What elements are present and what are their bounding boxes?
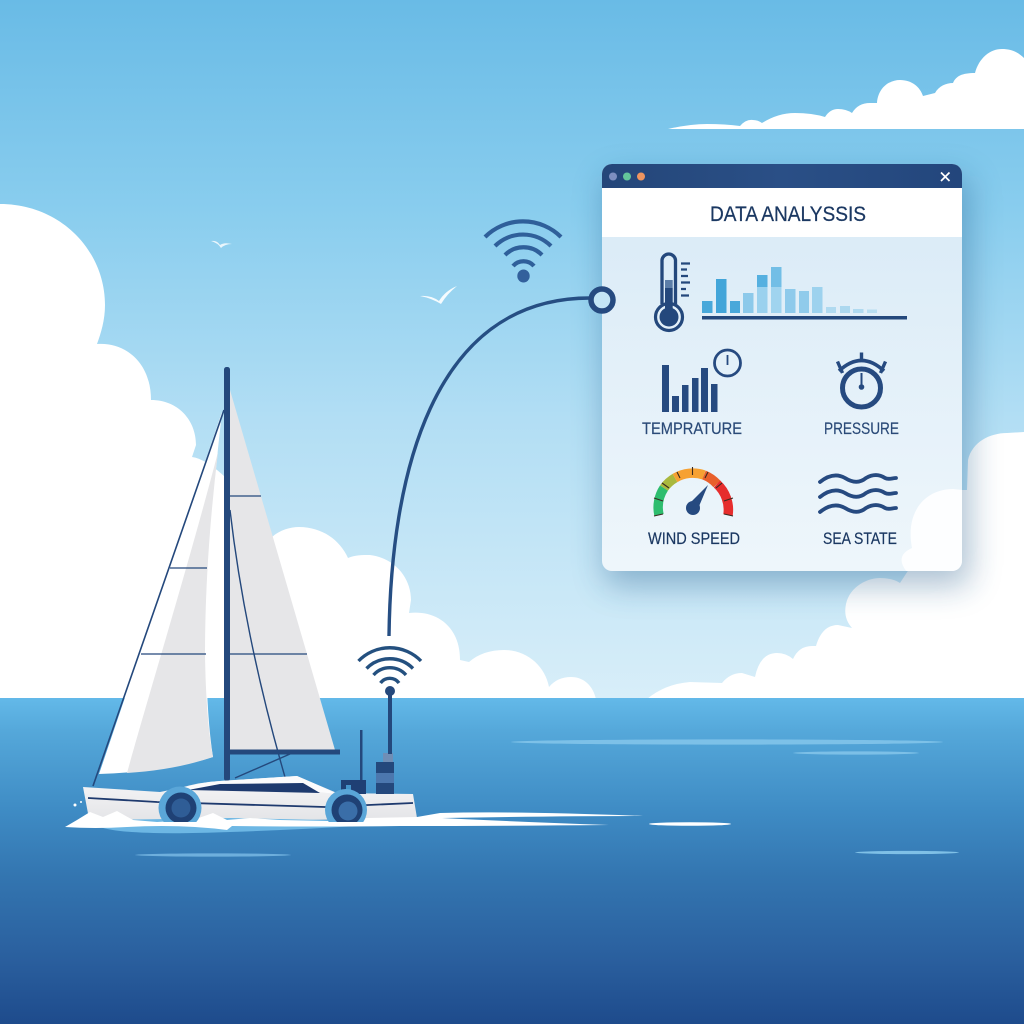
cabin top	[180, 776, 337, 794]
hull	[83, 776, 417, 824]
bird: large	[420, 286, 457, 304]
icon: upper wifi signal	[485, 221, 561, 282]
label: sea state: SEA STATE	[823, 529, 897, 548]
bar chart: histogram	[702, 267, 907, 320]
panel body	[602, 164, 962, 571]
icon: temperature bars with clock	[662, 350, 740, 412]
icon: pressure gauge	[838, 352, 886, 407]
rigging	[93, 410, 307, 786]
cloud: lower right bank	[647, 432, 1024, 699]
connection node	[591, 289, 613, 311]
sea highlights	[135, 739, 959, 857]
mast	[224, 367, 230, 781]
short antenna	[360, 730, 362, 782]
label: temprature: TEMPRATURE	[642, 419, 742, 438]
sailboat	[65, 367, 643, 833]
antenna housing	[376, 753, 394, 794]
antenna pole	[388, 694, 392, 754]
icon: thermometer	[656, 254, 690, 330]
bird: small	[211, 241, 232, 248]
sky background	[0, 0, 1024, 699]
main sail	[230, 390, 335, 750]
cloud: large left bank	[0, 204, 596, 699]
wheel: right	[325, 789, 367, 822]
panel shadow	[604, 176, 970, 586]
window title bar	[602, 164, 962, 188]
boom	[230, 750, 340, 754]
wash: bow spray and wake	[65, 801, 643, 833]
sea	[0, 698, 1024, 1024]
white title band	[602, 188, 962, 237]
cloud: top right	[668, 49, 1024, 129]
cabin window	[188, 783, 320, 793]
label: pressure: PRESSURE	[824, 419, 899, 438]
icon: sea state waves	[820, 475, 896, 512]
label: wind speed: WIND SPEED	[648, 529, 740, 548]
jib sail	[99, 412, 222, 774]
hull stripe	[88, 798, 413, 807]
icon: lower wifi signal	[358, 648, 421, 696]
icon: wind speed gauge	[654, 467, 733, 516]
panel cloud overlap	[902, 489, 964, 575]
panel: data analysis window	[602, 164, 964, 575]
wheel: left	[158, 786, 202, 822]
equipment box	[341, 780, 366, 794]
connection line	[389, 298, 590, 636]
title text: DATA ANALYSSIS	[710, 203, 866, 226]
